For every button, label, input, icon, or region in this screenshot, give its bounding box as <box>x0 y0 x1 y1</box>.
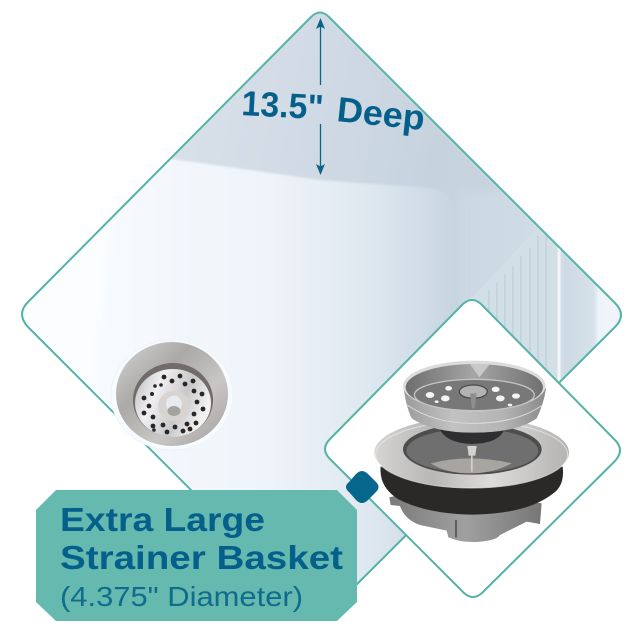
panel: strainer basket diamond <box>325 300 620 597</box>
heading: depth label <box>241 84 427 138</box>
basket interior <box>403 361 546 411</box>
callout: strainer basket label <box>36 490 357 621</box>
drain opening <box>403 424 542 475</box>
heading: depth label: Deep <box>335 90 427 138</box>
basket stem <box>438 427 505 444</box>
sink right wall <box>458 190 640 640</box>
sink floor <box>94 158 430 582</box>
ribbed drainboard <box>488 236 620 382</box>
heading: strainer basket: Strainer Basket <box>60 539 343 576</box>
product: strainer basket exploded view <box>374 361 569 542</box>
icon: sink drain strainer <box>111 340 233 450</box>
text: diameter: (4.375" Diameter) <box>60 581 303 612</box>
drain body base <box>389 490 542 542</box>
arrow: depth measurement <box>316 18 325 175</box>
flange ring <box>374 417 569 488</box>
heading: extra large: Extra Large <box>60 501 265 538</box>
heading: depth label: 13.5" <box>241 84 325 127</box>
left sink wall <box>0 200 170 500</box>
icon: small connector diamond <box>346 471 378 503</box>
rubber gasket <box>380 467 563 515</box>
basket body <box>403 385 546 433</box>
